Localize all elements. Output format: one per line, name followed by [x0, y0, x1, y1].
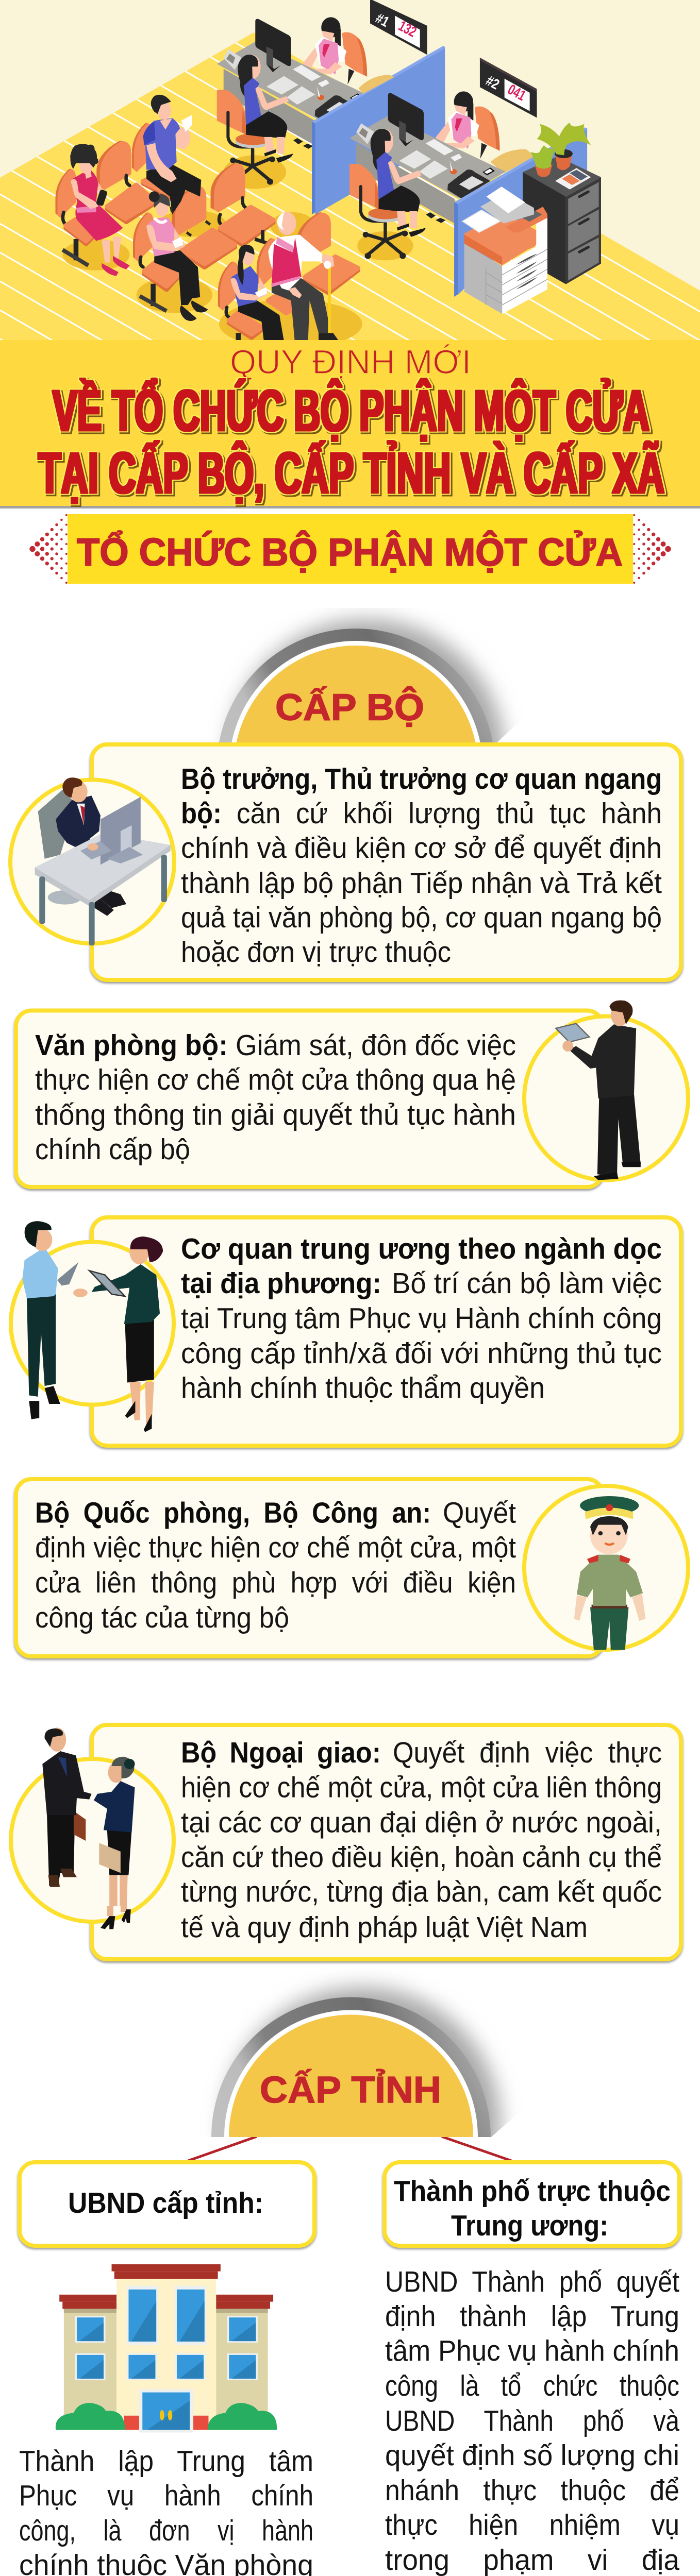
person: man in blue [143, 95, 201, 214]
sign 2 [480, 58, 537, 118]
text: Bo truong: thành lập bộ phận Tiếp nhận và Trả kết [181, 867, 662, 900]
text: Bo Quoc phong: cửa liên thông phù hợp với điều kiện [35, 1566, 516, 1599]
booth 2 [349, 91, 506, 260]
blue partition 1 [312, 46, 445, 214]
text: Thanh pho: trong phạm vi địa [385, 2544, 679, 2576]
text: UBND cap tinh: Phục vụ hành chính [19, 2479, 313, 2512]
text: Van phong bo: chính cấp bộ [35, 1133, 190, 1166]
copier [462, 187, 547, 314]
box: Thanh pho truc thuoc Trung uong: Trung ương: [451, 2209, 608, 2242]
text: Bo Quoc phong: Bộ Quốc phòng, Bộ Công an: [35, 1496, 431, 1529]
text: Thanh pho: nhánh thực thuộc để [385, 2474, 679, 2507]
text: Van phong bo: Văn phòng bộ: [35, 1029, 228, 1062]
text: Bo Quoc phong [35, 1496, 516, 1634]
text: Co quan trung uong [181, 1232, 662, 1404]
sign 2: #2 [483, 73, 502, 93]
blue partition 2 [454, 127, 587, 297]
connector lines: cap tinh [188, 2137, 511, 2161]
text: Bo truong: chính và điều kiện cơ sở để quyết định [181, 832, 662, 865]
text: Bo Quoc phong: định việc thực hiện cơ chế một cửa, một [35, 1531, 516, 1564]
right dot diamond [633, 514, 671, 584]
badge: cap bo [216, 619, 505, 907]
box: UBND cap tinh: UBND cấp tỉnh: [68, 2187, 263, 2219]
icon: heels [101, 1906, 131, 1929]
card: Bo Quoc phong, Bo Cong an [16, 1479, 688, 1656]
text: Van phong bo [35, 1029, 516, 1166]
text: Co quan trung uong: công cấp tỉnh/xã đối với những thủ tục [181, 1337, 662, 1370]
text: Thanh pho: tâm Phục vụ hành chính [385, 2334, 679, 2367]
text: Thanh pho: quyết định số lượng chi [385, 2439, 679, 2472]
box: Thanh pho truc thuoc Trung uong: Thành phố trực thuộc [394, 2175, 671, 2208]
text: Co quan trung uong: Cơ quan trung ương theo ngành dọc [181, 1232, 662, 1265]
box: Thanh pho truc thuoc Trung uong [385, 2162, 679, 2246]
section ribbon [29, 514, 671, 584]
text: UBND cap tinh [19, 2445, 313, 2576]
badge: cap tinh [211, 1987, 501, 2276]
text: Bo Ngoai giao: căn cứ theo điều kiện, hoàn cảnh cụ thể [181, 1841, 662, 1874]
icon: two women [22, 1221, 163, 1432]
heading: cap tinh: CẤP TỈNH [260, 2069, 441, 2111]
text: Bo Quoc phong: công tác của từng bộ [35, 1601, 289, 1634]
card: Co quan trung uong [11, 1217, 681, 1446]
header illustration: one-stop office [0, 0, 700, 340]
text: Bo Ngoai giao: Bộ Ngoại giao: [181, 1736, 381, 1769]
text: Bo truong: bộ: [181, 797, 222, 830]
icon: man with tablet [556, 1001, 641, 1180]
text: Bo truong [181, 762, 662, 969]
text: Co quan trung uong: tại Trung tâm Phục vụ Hành chính công [181, 1302, 662, 1335]
filing cabinet [523, 157, 601, 284]
ribbon heading: TỔ CHỨC BỘ PHẬN MỘT CỬA [77, 531, 623, 574]
text: Co quan trung uong: hành chính thuộc thẩm quyền [181, 1371, 545, 1404]
text: UBND cap tinh: công, là đơn vị hành [19, 2514, 313, 2547]
text: UBND cap tinh: Thành lập Trung tâm [19, 2445, 313, 2478]
sign 1: 132 [396, 18, 419, 41]
card: Bo truong [10, 744, 681, 980]
heading: cap bo: CẤP BỘ [275, 686, 424, 728]
text: Bo truong: quả tại văn phòng bộ, cơ quan ngang bộ [181, 901, 662, 934]
icon: man at desk [35, 777, 171, 945]
subtitle: quy dinh moi: QUY ĐỊNH MỚI [230, 343, 471, 381]
person: woman in pink [146, 191, 210, 321]
booth 1 [217, 17, 373, 186]
text: Bo truong: hoặc đơn vị trực thuộc [181, 936, 451, 969]
text: Co quan trung uong: Bố trí cán bộ làm việc [392, 1267, 662, 1300]
text: Bo Ngoai giao: hiện cơ chế một cửa, một cửa liên thông [181, 1771, 662, 1804]
text: Bo truong: căn cứ khối lượng thủ tục hành [237, 797, 662, 830]
sign 1 [370, 0, 427, 55]
text: Bo Ngoai giao: tại các cơ quan đại diện ở nước ngoài, [181, 1806, 662, 1839]
person: woman in blue [231, 245, 284, 341]
waiting chairs [56, 123, 358, 342]
person: woman in red dress [70, 144, 130, 276]
text: Bo Ngoai giao: tế và quy định pháp luật Việt Nam [181, 1911, 588, 1944]
text: Van phong bo: thực hiện cơ chế một cửa thông qua hệ [35, 1063, 516, 1096]
card: Bo Ngoai giao [11, 1725, 681, 1959]
plants [530, 123, 591, 177]
title text [38, 378, 664, 505]
box: UBND cap tinh [20, 2162, 314, 2246]
sign 1: #1 [373, 10, 392, 30]
card: Van phong bo [16, 1001, 688, 1187]
text: Van phong bo: Giám sát, đôn đốc việc [236, 1029, 516, 1062]
text: Van phong bo: thống thông tin giải quyết thủ tục hành [35, 1098, 516, 1131]
left dot diamond [29, 514, 68, 584]
sign 2: 041 [505, 81, 528, 104]
text: Bo Quoc phong: Quyết [443, 1496, 516, 1529]
icon: provincial building [56, 2264, 277, 2432]
text: Thanh pho [385, 2265, 679, 2576]
text: Co quan trung uong: tại địa phương: [181, 1267, 381, 1300]
icon: handshake [42, 1727, 135, 1906]
title band [0, 340, 700, 509]
text: Bo Ngoai giao: từng nước, từng địa bàn, cam kết quốc [181, 1875, 662, 1908]
person: old man [268, 212, 339, 341]
icon: soldier [574, 1496, 645, 1650]
text: Bo Ngoai giao: Quyết định việc thực [393, 1736, 662, 1769]
text: Thanh pho: định thành lập Trung [385, 2300, 679, 2333]
text: Bo Ngoai giao [181, 1736, 662, 1944]
